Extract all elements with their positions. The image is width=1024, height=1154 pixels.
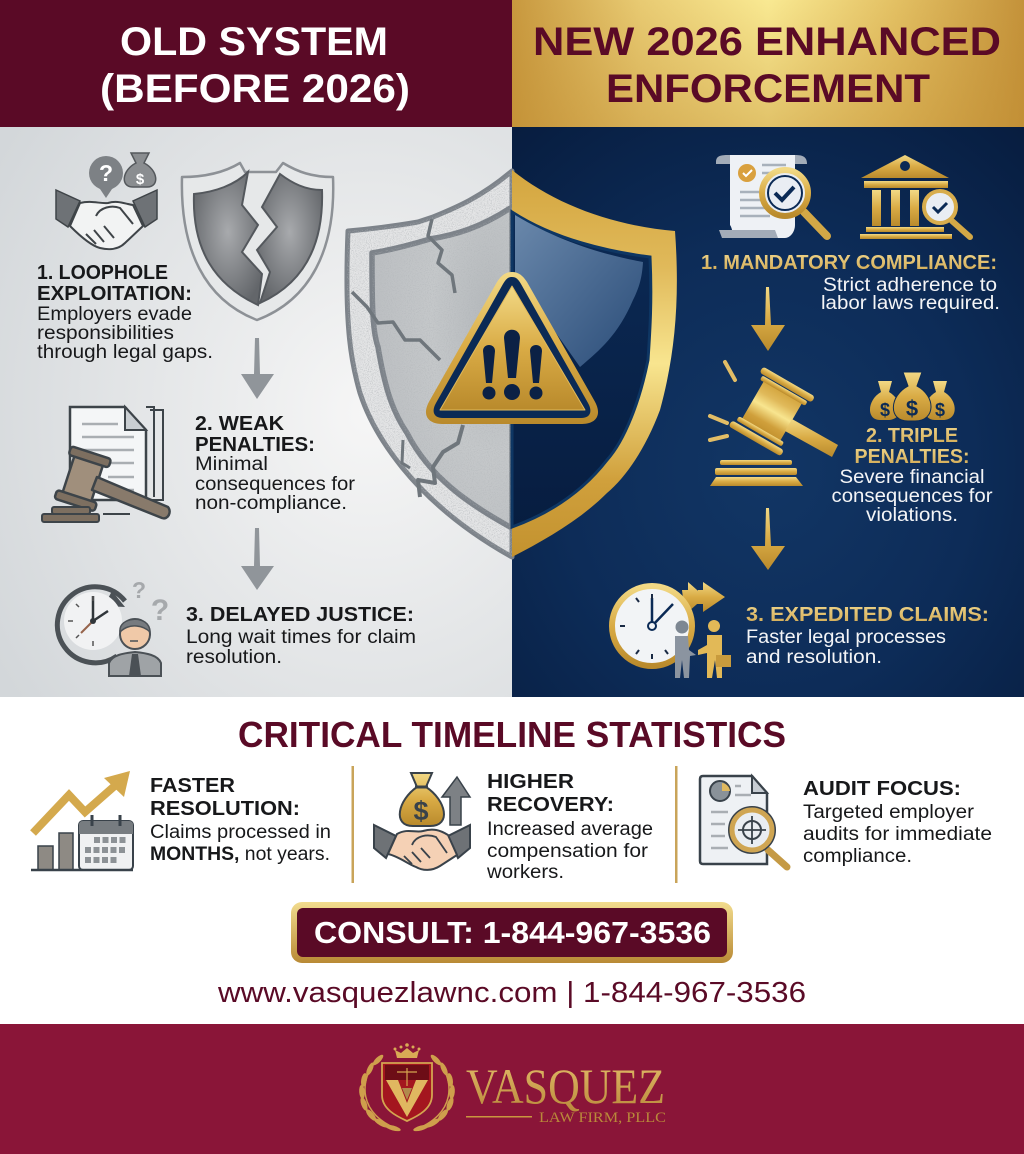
header: old system: [0, 0, 512, 127]
text: weak penalties: PENALTIES:: [195, 434, 315, 456]
text: triple penalties: [832, 425, 993, 526]
text: loophole exploitation: Employers evade: [37, 304, 192, 325]
call to action button: CONSULT: 1-844-967-3536: [314, 915, 711, 950]
text: triple penalties: consequences for: [832, 486, 993, 507]
icon: delayed clock and worried person: ?: [132, 577, 146, 603]
text: expedited claims: Faster legal processes: [746, 627, 946, 648]
heading: CRITICAL TIMELINE STATISTICS: [238, 714, 786, 755]
icon: golden gavel: [710, 362, 838, 486]
icon: fast clock and handshake figures: [612, 582, 731, 678]
panel: old system: [0, 0, 512, 697]
text: higher recovery: workers.: [486, 862, 564, 883]
icon: rising chart and calendar: [31, 771, 133, 870]
icon: money bag and handshake: [374, 773, 470, 870]
logo wordmark: LAW FIRM, PLLC: [539, 1110, 666, 1126]
icon: three money bags: [870, 372, 955, 421]
shield: polished gold half: [512, 170, 677, 557]
text: audit focus: [803, 778, 992, 867]
text: weak penalties: consequences for: [195, 474, 356, 495]
icon: money bag and handshake: $: [413, 796, 429, 826]
text: delayed justice: Long wait times for claim: [186, 627, 416, 648]
text: triple penalties: 2. TRIPLE: [866, 425, 958, 447]
panel: new enforcement: [512, 0, 1024, 697]
text: expedited claims: [746, 604, 989, 668]
text: triple penalties: PENALTIES:: [854, 446, 970, 468]
icon: three money bags: $: [906, 396, 918, 421]
icon: three money bags: $: [935, 400, 945, 420]
icon: handshake with question and money bag: [56, 153, 157, 249]
header: old system: (BEFORE 2026): [100, 67, 410, 111]
text: loophole exploitation: 1. LOOPHOLE: [37, 262, 168, 284]
logo crest: [359, 1043, 455, 1132]
arrow: old step 1 to 2: [241, 338, 274, 399]
text: weak penalties: 2. WEAK: [195, 413, 285, 435]
arrow: new step 2 to 3: [751, 508, 785, 570]
icon: delayed clock and worried person: ?: [151, 594, 169, 627]
laurel wreath: [359, 1053, 455, 1132]
text: faster resolution: Claims processed in: [150, 822, 331, 843]
shield with V: [382, 1063, 432, 1121]
text: delayed justice: resolution.: [186, 647, 282, 668]
icon: handshake with question and money bag: ?: [99, 160, 113, 186]
text: audit focus: audits for immediate: [803, 824, 992, 845]
icon: courthouse under magnifier: [860, 155, 970, 239]
header: new enforcement: NEW 2026 ENHANCED: [533, 20, 1001, 64]
text: loophole exploitation: [37, 262, 213, 363]
text: delayed justice: [186, 604, 416, 668]
text: weak penalties: [195, 413, 356, 514]
text: expedited claims: and resolution.: [746, 647, 882, 668]
text: loophole exploitation: EXPLOITATION:: [37, 283, 192, 305]
icon: warning triangle: [426, 272, 598, 424]
text: loophole exploitation: responsibilities: [37, 323, 174, 344]
text: triple penalties: Severe financial: [840, 467, 984, 488]
text: higher recovery: RECOVERY:: [487, 794, 614, 816]
divider: [675, 766, 678, 883]
text: faster resolution: RESOLUTION:: [150, 798, 300, 820]
section: critical timeline statistics: [31, 714, 992, 883]
text: higher recovery: [486, 771, 653, 883]
arrow: old step 2 to 3: [241, 528, 274, 590]
call to action button: [291, 902, 733, 963]
header: new enforcement: ENFORCEMENT: [606, 67, 930, 111]
text: audit focus: compliance.: [803, 846, 912, 867]
text: faster resolution: [150, 775, 331, 865]
text: loophole exploitation: through legal gaps.: [37, 342, 213, 363]
text: triple penalties: violations.: [866, 505, 958, 526]
icon: documents and gavel: [42, 407, 170, 522]
text: higher recovery: HIGHER: [487, 771, 575, 793]
central split shield with warning sign: [347, 170, 677, 557]
header: old system: OLD SYSTEM: [120, 20, 388, 64]
icon: delayed clock and worried person: [57, 577, 169, 676]
shield: cracked grey half: [347, 171, 512, 557]
text: faster resolution: MONTHS, not years.: [150, 844, 330, 865]
arrow: new step 1 to 2: [751, 287, 785, 351]
text: higher recovery: Increased average: [487, 819, 653, 840]
header: new enforcement: [512, 0, 1024, 127]
text: mandatory compliance: labor laws required.: [821, 293, 1000, 314]
crown: [394, 1043, 420, 1058]
text: audit focus: Targeted employer: [803, 802, 975, 823]
icon: broken shield: [182, 163, 333, 320]
text: mandatory compliance: [701, 252, 1000, 314]
text: weak penalties: Minimal: [195, 454, 268, 475]
footer band: [0, 1024, 1024, 1154]
icon: handshake with question and money bag: $: [136, 171, 145, 188]
icon: three money bags: $: [880, 400, 890, 420]
logo wordmark: VASQUEZ: [466, 1058, 665, 1114]
icon: audit document and magnifier: [700, 776, 787, 867]
text: expedited claims: 3. EXPEDITED CLAIMS:: [746, 604, 989, 626]
contact line: www.vasquezlawnc.com | 1-844-967-3536: [217, 977, 806, 1009]
text: weak penalties: non-compliance.: [195, 493, 347, 514]
text: mandatory compliance: 1. MANDATORY COMPLIANCE:: [701, 252, 997, 274]
text: higher recovery: compensation for: [487, 841, 649, 862]
text: audit focus: AUDIT FOCUS:: [803, 778, 961, 800]
text: mandatory compliance: Strict adherence to: [823, 275, 997, 296]
text: faster resolution: FASTER: [150, 775, 236, 797]
divider: [352, 766, 354, 883]
text: delayed justice: 3. DELAYED JUSTICE:: [186, 604, 414, 626]
icon: document under magnifier: [716, 155, 827, 238]
